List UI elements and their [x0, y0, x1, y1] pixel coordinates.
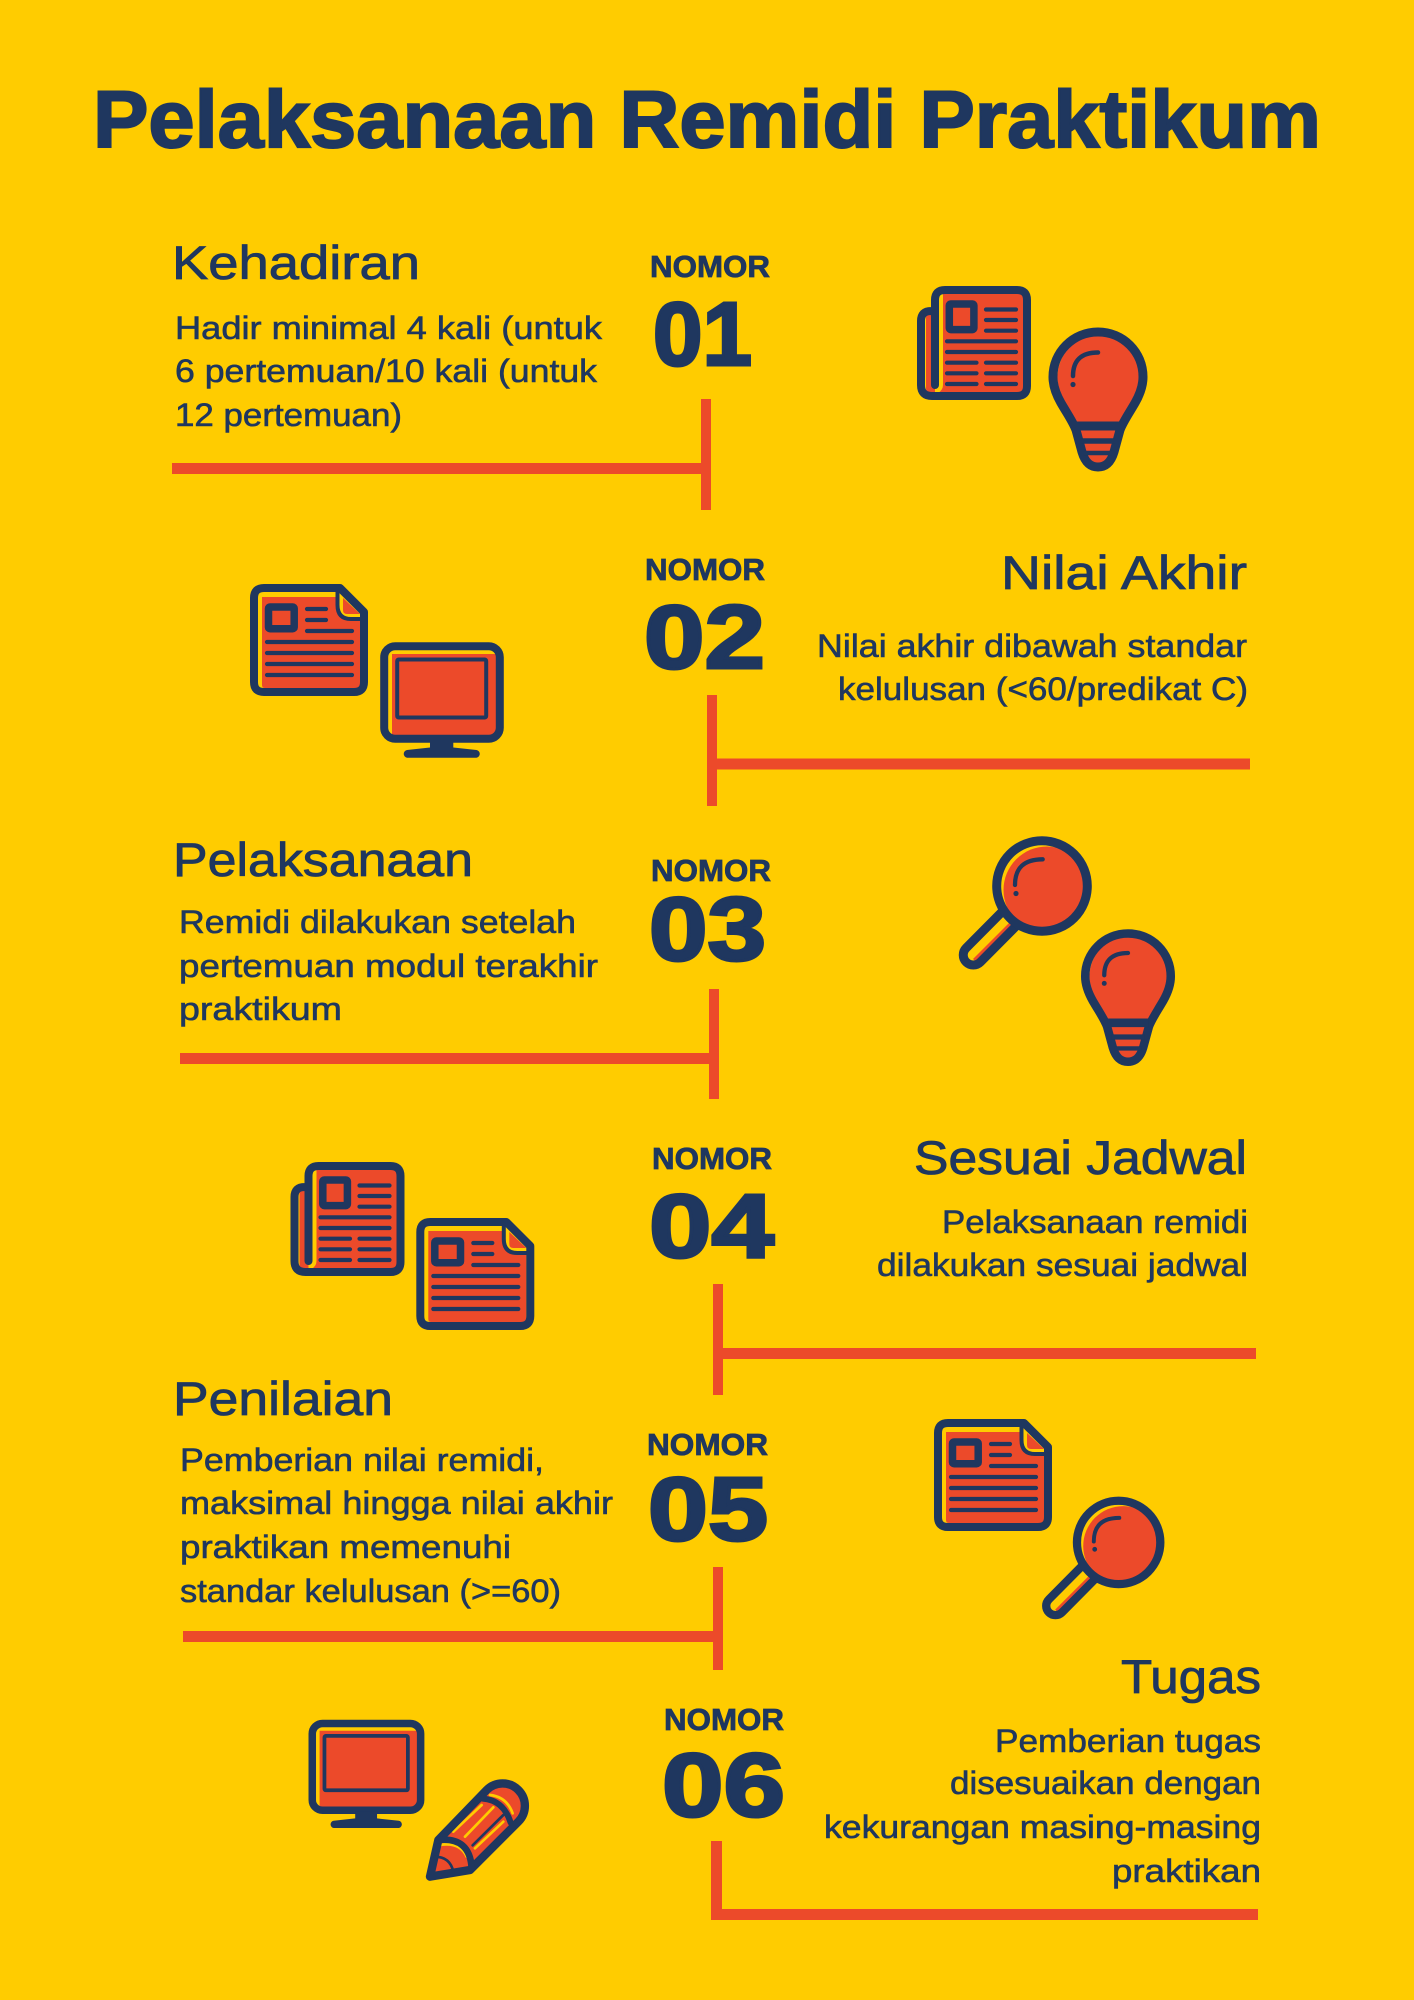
number: NOMOR 01	[650, 249, 770, 385]
icon: pencil	[430, 1783, 525, 1877]
number: NOMOR 04	[649, 1141, 774, 1277]
connector line 02	[707, 695, 1250, 806]
text block: Pelaksanaan description	[179, 904, 598, 1027]
text block: Pelaksanaan description: praktikum	[179, 991, 342, 1027]
text block: Nilai Akhir description	[817, 628, 1248, 707]
panel: section 01 Kehadiran	[172, 236, 1148, 510]
text block: Sesuai Jadwal description: Pelaksanaan remidi	[942, 1204, 1248, 1240]
number: NOMOR 01: NOMOR	[650, 249, 770, 284]
number: NOMOR 02	[644, 552, 765, 688]
text block: Penilaian description: Pemberian nilai remidi,	[180, 1442, 544, 1478]
text block: Kehadiran description	[175, 310, 603, 433]
connector line 01	[172, 399, 711, 510]
connector line 04	[713, 1284, 1256, 1395]
icon: magnifying glass	[963, 841, 1090, 965]
text block: Tugas description: disesuaikan dengan	[950, 1765, 1261, 1801]
text block: Nilai Akhir description: kelulusan (<60/predikat C)	[838, 671, 1248, 707]
connector line 03	[180, 989, 719, 1099]
number: NOMOR 06	[662, 1702, 785, 1836]
icon: monitor	[384, 646, 500, 758]
icon: light bulb	[1053, 332, 1148, 468]
number: NOMOR 01: 01	[653, 285, 752, 385]
panel: section 03 Pelaksanaan	[173, 833, 1175, 1099]
text block: Penilaian description: maksimal hingga nilai akhir	[180, 1485, 613, 1521]
heading: Nilai Akhir: Nilai Akhir	[1001, 546, 1247, 599]
number: NOMOR 05: 05	[648, 1460, 768, 1560]
number: NOMOR 06: NOMOR	[664, 1702, 784, 1737]
text block: Kehadiran description: Hadir minimal 4 kali (untuk	[175, 310, 603, 346]
text block: Sesuai Jadwal description	[877, 1204, 1248, 1283]
text block: Pelaksanaan description: Remidi dilakukan setelah	[179, 904, 576, 940]
number: NOMOR 04: NOMOR	[652, 1141, 772, 1176]
number: NOMOR 03: 03	[649, 880, 766, 980]
number: NOMOR 05	[647, 1427, 768, 1560]
text block: Penilaian description: praktikan memenuhi	[180, 1529, 511, 1565]
panel: section 06 Tugas	[312, 1650, 1261, 1920]
title: Pelaksanaan Remidi Praktikum	[93, 75, 1321, 165]
heading: Sesuai Jadwal: Sesuai Jadwal	[914, 1131, 1247, 1184]
text block: Tugas description: praktikan	[1112, 1853, 1261, 1889]
text block: Pelaksanaan description: pertemuan modul terakhir	[179, 948, 598, 984]
text block: Tugas description	[824, 1723, 1261, 1889]
connector line 05	[183, 1567, 723, 1670]
icon: light bulb	[1085, 934, 1175, 1063]
icon: document	[938, 1423, 1048, 1527]
panel: section 02 Nilai Akhir	[254, 546, 1250, 806]
panel: section 04 Sesuai Jadwal	[294, 1131, 1256, 1395]
text block: Kehadiran description: 12 pertemuan)	[175, 397, 402, 433]
text block: Kehadiran description: 6 pertemuan/10 kali (untuk	[175, 353, 598, 389]
heading: Tugas: Tugas	[1121, 1650, 1261, 1703]
number: NOMOR 04: 04	[649, 1177, 774, 1277]
icon: document	[254, 588, 364, 692]
number: NOMOR 03	[649, 853, 771, 980]
text block: Penilaian description	[180, 1442, 613, 1609]
icon: monitor	[312, 1723, 421, 1828]
icon: magnifying glass	[1046, 1501, 1163, 1615]
number: NOMOR 05: NOMOR	[647, 1427, 768, 1462]
number: NOMOR 02: 02	[644, 588, 765, 688]
text block: Tugas description: Pemberian tugas	[995, 1723, 1261, 1759]
text block: Penilaian description: standar kelulusan (>=60)	[180, 1573, 561, 1609]
icon: newspaper	[921, 290, 1027, 396]
number: NOMOR 06: 06	[662, 1736, 785, 1836]
connector line 06	[711, 1841, 1258, 1920]
text block: Tugas description: kekurangan masing-masing	[824, 1809, 1261, 1845]
number: NOMOR 03: NOMOR	[651, 853, 771, 888]
icon: document	[420, 1222, 530, 1326]
icon: newspaper	[294, 1166, 400, 1272]
heading: Pelaksanaan: Pelaksanaan	[173, 833, 473, 886]
text block: Sesuai Jadwal description: dilakukan sesuai jadwal	[877, 1247, 1248, 1283]
heading: Penilaian: Penilaian	[173, 1372, 393, 1425]
panel: section 05 Penilaian	[173, 1372, 1163, 1670]
text block: Nilai Akhir description: Nilai akhir dibawah standar	[817, 628, 1247, 664]
number: NOMOR 02: NOMOR	[645, 552, 765, 587]
heading: Kehadiran: Kehadiran	[172, 236, 420, 289]
